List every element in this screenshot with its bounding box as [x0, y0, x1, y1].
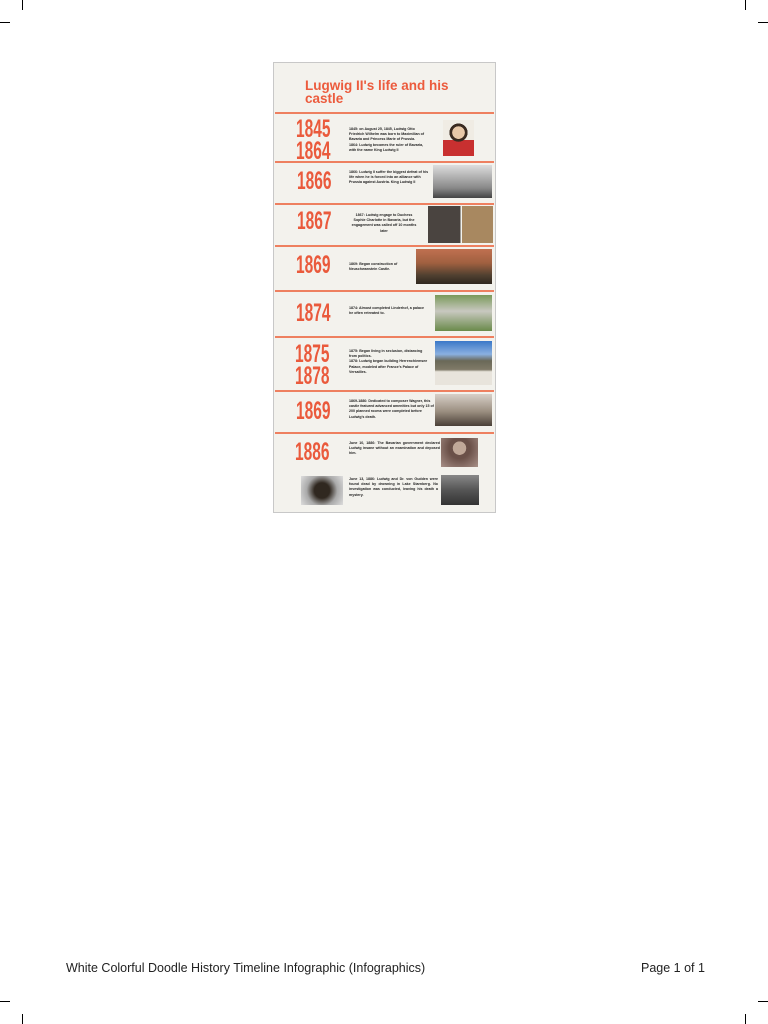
- year: 1845 1864: [296, 115, 330, 165]
- panel: infographic: [273, 62, 496, 513]
- image: battle: [433, 165, 492, 198]
- text: June 10 1886: June 10, 1886: The Bavarian government declared Ludwig insane without an examination and deposed him.: [349, 441, 440, 455]
- image: linderhof: [435, 295, 492, 331]
- text: June 13 1886: June 13, 1886: Ludwig and Dr. von Gudden were found dead by drowning in Lake Starnberg. No investigation was conducted, leaving his death a mystery.: [349, 477, 438, 497]
- year: 1875 1878: 1875: [295, 340, 329, 368]
- text: 1875: 1878: Ludwig began building Herrenchiemsee Palace, modeled after France's Palace of Versailles.: [349, 359, 427, 374]
- text: 1845: [349, 127, 424, 152]
- text: 1875: [349, 349, 428, 374]
- image: lake: [441, 475, 479, 505]
- year: 1845 1864: 1864: [296, 137, 330, 165]
- footer: document title: White Colorful Doodle History Timeline Infographic (Infographics): [66, 961, 425, 975]
- image: neuschwanstein: [416, 249, 492, 284]
- text: 1867: 1867: Ludwig engage to Duchess Sophie Charlotte in Bavaria, but the engagement was called off 10 months later: [352, 213, 416, 233]
- year: 1886: 1886: [295, 438, 329, 466]
- title: [305, 78, 448, 106]
- year: 1875 1878: [295, 340, 330, 390]
- footer: page number: Page 1 of 1: [641, 961, 705, 975]
- text: 1845: 1845: on August 25, 1845, Ludwig Otto Friedrich Wilhelm was born to Maximilian of Bavaria and Princess Marie of Prussia.: [349, 127, 424, 141]
- title: Lugwig II's life and his: [305, 78, 448, 93]
- year: 1867: 1867: [297, 207, 331, 235]
- year: 1845 1864: 1845: [296, 115, 330, 143]
- year: 1874: 1874: [296, 299, 330, 327]
- text: 1869-1886: 1869-1886: Dedicated to composer Wagner, this castle featured advanced amenities but only 15 of 200 planned rooms were completed before Ludwig's death.: [349, 399, 434, 419]
- year: 1866: 1866: [297, 167, 331, 195]
- year: 1869: 1869: [296, 251, 330, 279]
- title: castle: [305, 91, 343, 106]
- text: 1875: 1875: Began living in seclusion, distancing from politics.: [349, 349, 422, 358]
- text: 1866: 1866: Ludwig II suffer the biggest defeat of his life when he is forced into an alliance with Prussia against Austria. King Ludwig II: [349, 170, 428, 184]
- image: death scene: [301, 476, 343, 505]
- image: ludwig portrait: [441, 438, 478, 467]
- image: herrenchiemsee: [435, 341, 492, 385]
- year: 1869 (Wagner): 1869: [296, 397, 330, 425]
- year: 1875 1878: 1878: [295, 362, 329, 390]
- image: castle sepia: [435, 394, 492, 426]
- text: 1874: 1874: Almost completed Linderhof, a palace he often retreated to.: [349, 306, 424, 315]
- text: 1845: 1864: Ludwig becomes the ruler of Bavaria, with the name King Ludwig II: [349, 143, 423, 152]
- image: couple photos: [428, 206, 493, 243]
- image: portrait: [443, 120, 474, 156]
- text: 1869: 1869: Began construction of Neuschwanstein Castle.: [349, 262, 397, 271]
